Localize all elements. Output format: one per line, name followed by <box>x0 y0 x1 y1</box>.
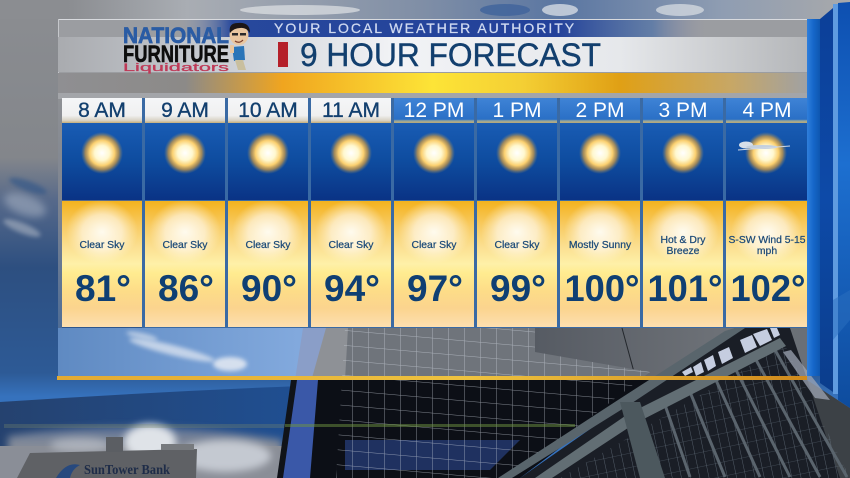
column: 3 PM: Breeze <box>667 246 700 257</box>
column: 1 PM: Clear Sky <box>494 240 540 251</box>
column: 12 PM: 97° <box>407 268 463 309</box>
header: gold gradient bar <box>58 73 807 93</box>
column: 12 PM: Clear Sky <box>411 240 457 251</box>
column: 3 PM: Hot & Dry <box>660 235 706 246</box>
column: 10 AM <box>228 98 308 327</box>
background: glass tower <box>277 328 650 478</box>
logo: National Furniture Liquidators: Liquidators <box>123 62 230 74</box>
column: 8 AM: Clear Sky <box>79 240 125 251</box>
column: 9 AM: Clear Sky <box>162 240 208 251</box>
column: 2 PM: 100° <box>564 268 640 309</box>
column: 8 AM: 81° <box>75 268 131 309</box>
icon: cartoon mascot <box>230 23 250 70</box>
column: 3 PM <box>643 98 723 327</box>
right side blue columns <box>807 2 850 408</box>
column: 4 PM: mph <box>757 246 777 257</box>
column: 1 PM <box>477 98 557 327</box>
icon: red marker <box>278 42 288 67</box>
logo: National Furniture Liquidators <box>123 23 250 74</box>
header: blue tagline band: YOUR LOCAL WEATHER AUTHORITY <box>274 20 576 36</box>
column: 1 PM: 99° <box>490 268 546 309</box>
column: 2 PM: Mostly Sunny <box>569 240 632 251</box>
background: grey sky and right ground <box>535 328 850 478</box>
column dividers backing <box>142 98 807 328</box>
column: 12 PM <box>394 98 474 327</box>
column: 3 PM: 3 PM <box>658 99 708 122</box>
column: 11 AM: 94° <box>324 268 380 309</box>
column: 4 PM: S-SW Wind 5-15 <box>728 235 806 246</box>
icon: thin cloud <box>738 142 790 150</box>
bank building: SunTower Bank <box>84 463 170 478</box>
panel backdrop <box>58 19 807 378</box>
header: blue tagline band <box>180 20 705 37</box>
horizontal gold rule <box>57 376 807 380</box>
column: 2 PM: 2 PM <box>575 99 625 122</box>
column: 11 AM <box>311 98 391 327</box>
title: 9 hour forecast: 9 HOUR FORECAST <box>300 37 601 73</box>
background: stadium truss <box>498 328 850 478</box>
column: 2 PM <box>560 98 640 327</box>
logo: National Furniture Liquidators: NATIONAL <box>123 23 229 48</box>
column: 9 AM: 9 AM <box>161 99 209 122</box>
column: 10 AM: Clear Sky <box>245 240 291 251</box>
header: white title band <box>58 37 807 72</box>
column: 10 AM: 90° <box>241 268 297 309</box>
column: 9 AM: 86° <box>158 268 214 309</box>
bank building <box>17 437 197 478</box>
column: 4 PM: 102° <box>730 268 806 309</box>
column: 3 PM: 101° <box>648 268 722 309</box>
column: 8 AM: 8 AM <box>78 99 126 122</box>
column: 4 PM: 4 PM <box>742 99 792 122</box>
column: 11 AM: 11 AM <box>322 99 380 122</box>
column: 10 AM: 10 AM <box>238 99 298 122</box>
background: lower skyline with clouds and bank building <box>0 386 300 478</box>
column: 11 AM: Clear Sky <box>328 240 374 251</box>
column: 12 PM: 12 PM <box>404 99 464 122</box>
column: 8 AM <box>62 98 142 327</box>
logo: National Furniture Liquidators: FURNITURE <box>123 41 229 68</box>
column: 1 PM: 1 PM <box>492 99 542 122</box>
column: 9 AM <box>145 98 225 327</box>
column: 4 PM <box>726 98 807 327</box>
